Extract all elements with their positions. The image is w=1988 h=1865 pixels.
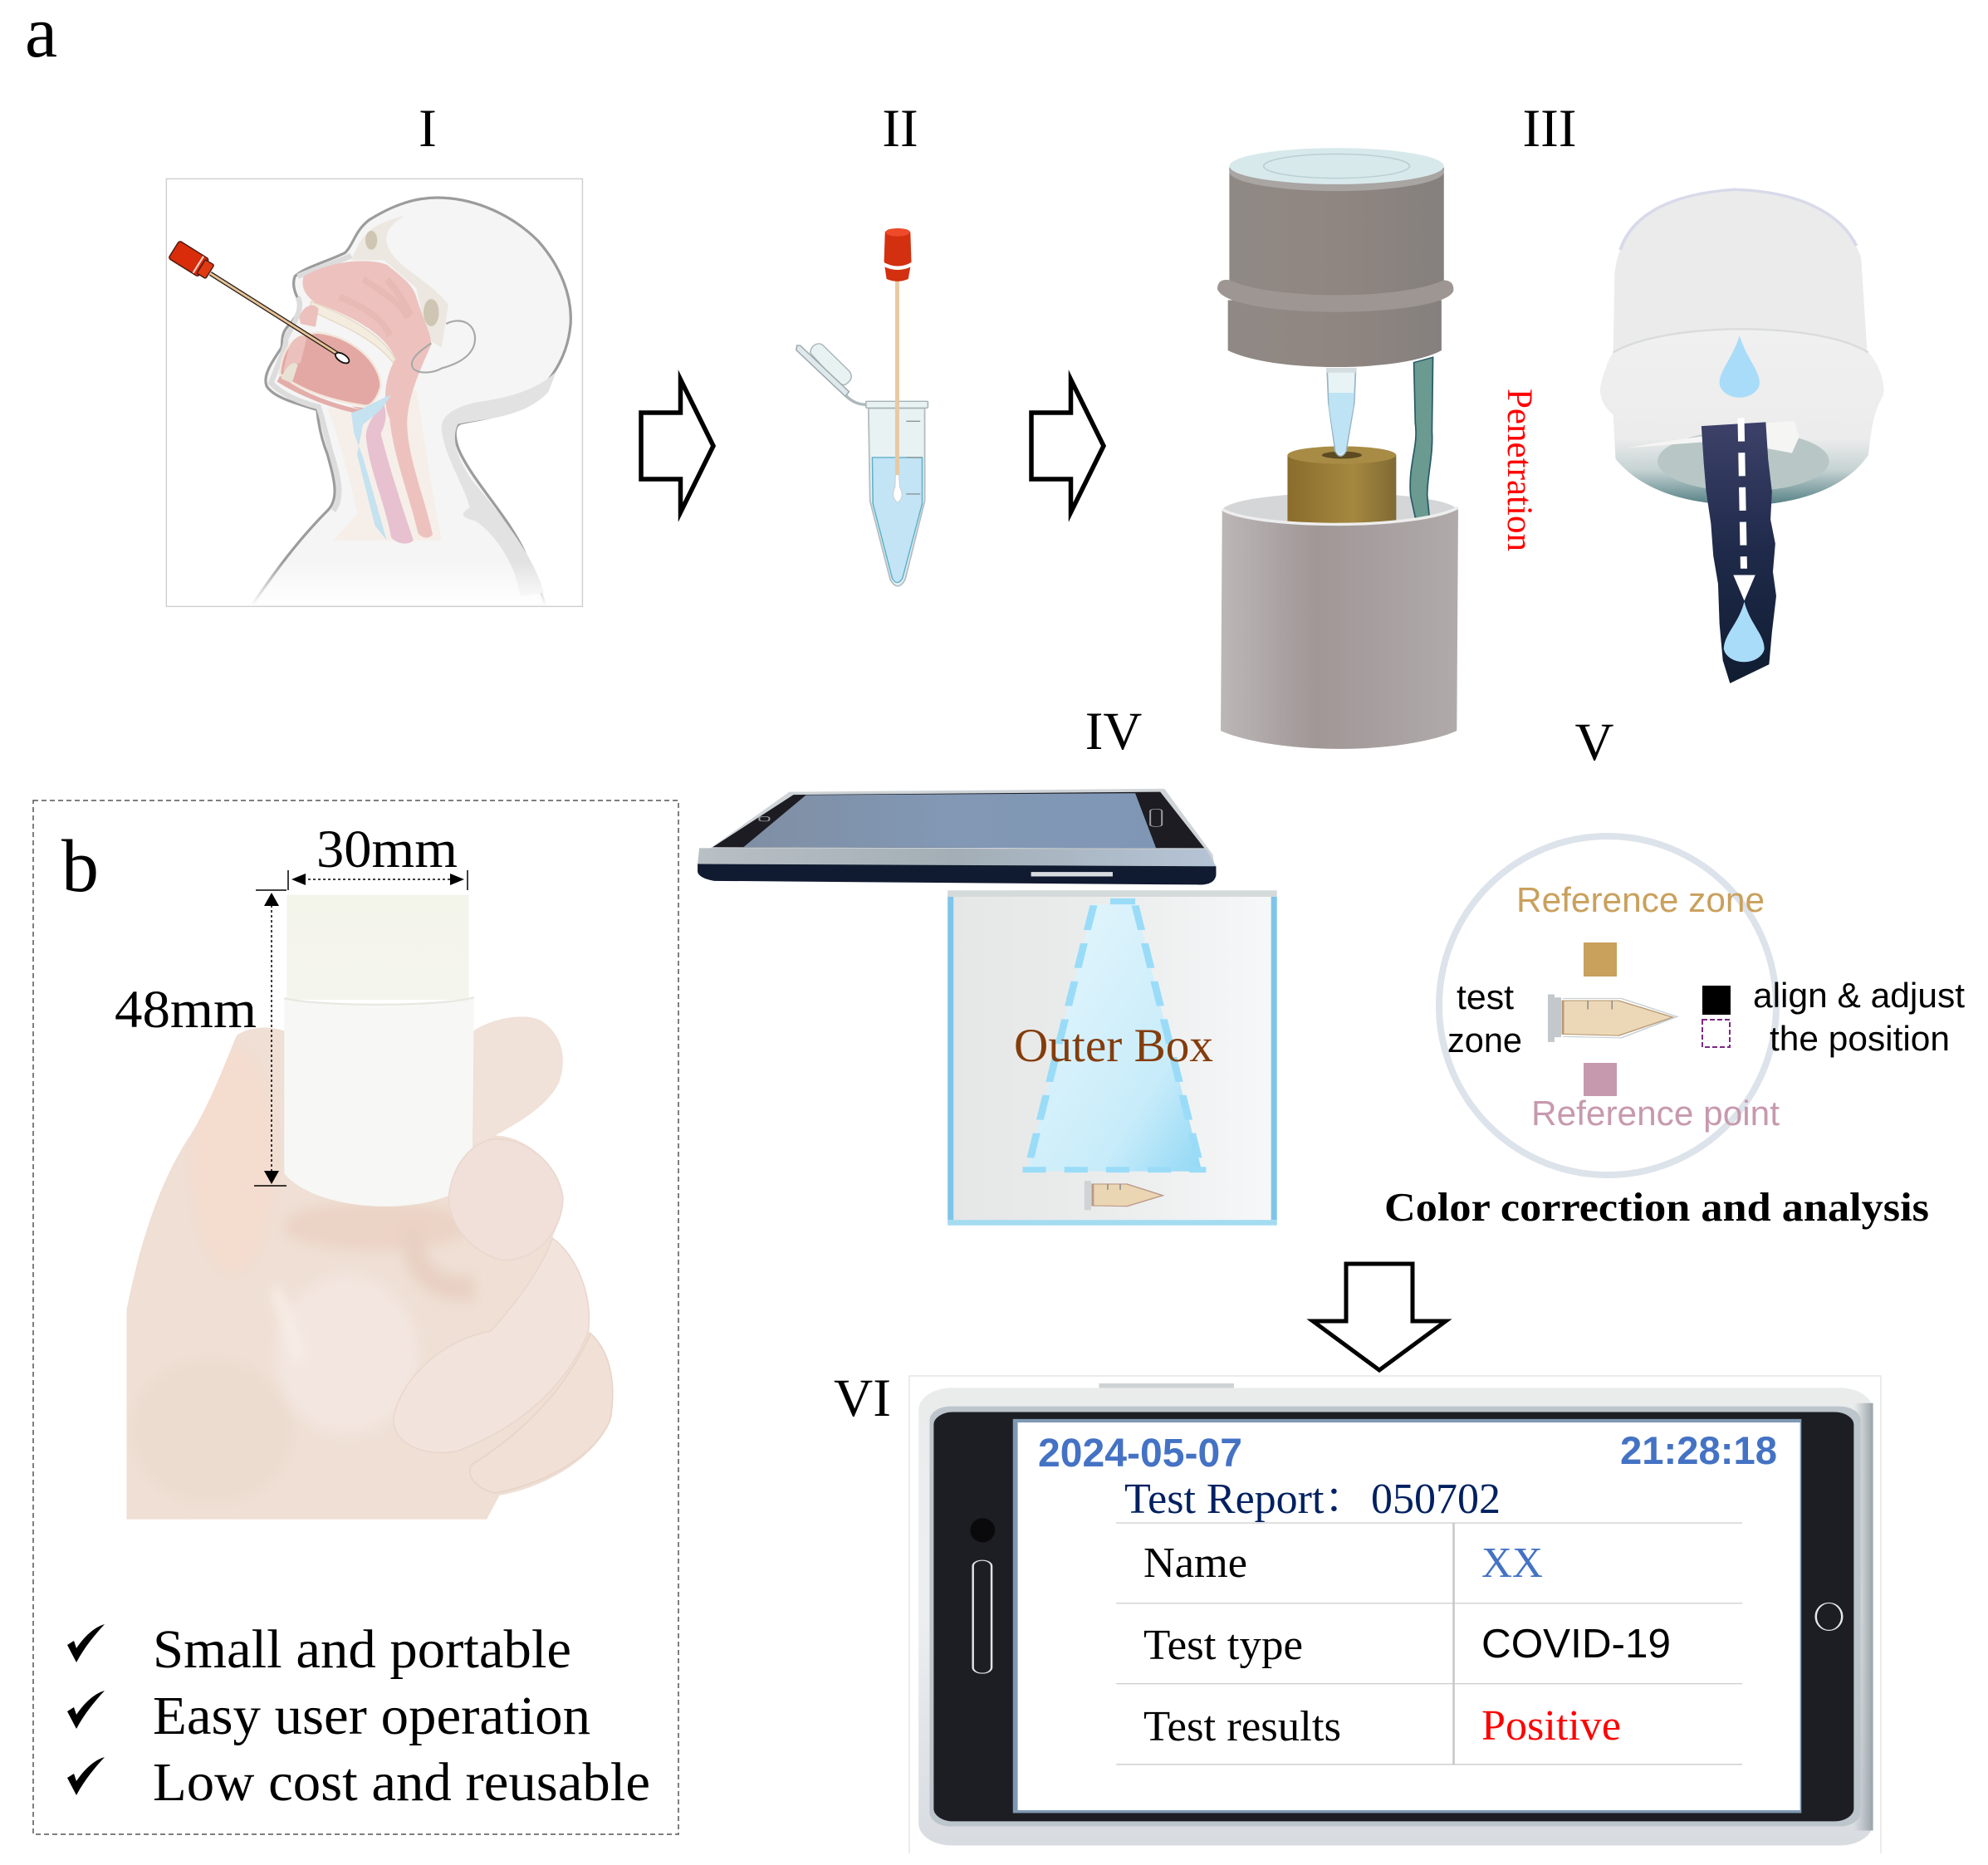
time: 21:28:18	[1620, 1428, 1777, 1472]
alignment marker solid	[1702, 986, 1731, 1015]
reagent tube	[1326, 368, 1357, 456]
swab cap	[169, 241, 215, 281]
device flange line	[284, 997, 474, 1005]
arrow II to III	[1031, 379, 1104, 512]
lid inner ring	[1264, 154, 1409, 179]
tube marks	[906, 421, 923, 494]
panel label b: b	[61, 825, 99, 908]
dimension 48mm label: 48mm	[115, 980, 257, 1040]
screen	[1018, 1422, 1800, 1810]
nasal airway	[302, 261, 433, 538]
align label: align & adjust	[1753, 976, 1965, 1015]
gold sample pad	[1287, 446, 1396, 530]
inner edge	[929, 1407, 1861, 1827]
Penetration label: Penetration	[1500, 389, 1539, 551]
thyroid cartilage	[351, 395, 391, 541]
skull bone	[351, 216, 448, 348]
foam top rim	[1620, 189, 1856, 250]
position label: the position	[1770, 1019, 1950, 1058]
arrow I to II	[641, 379, 713, 512]
tablet side button	[1031, 872, 1113, 876]
cap highlight	[885, 228, 910, 237]
home button	[1816, 1603, 1842, 1630]
arrow V to VI	[1313, 1264, 1446, 1370]
reference point label: Reference point	[1531, 1094, 1780, 1133]
test label: test	[1457, 977, 1514, 1016]
box bottom edge	[947, 1220, 1277, 1226]
report title: 050702	[1371, 1476, 1501, 1523]
shoulder groove	[1613, 329, 1868, 352]
reference zone label: Reference zone	[1516, 880, 1765, 919]
upper drop	[1720, 335, 1760, 398]
lower cup rim highlight	[1222, 507, 1458, 524]
ear	[412, 321, 475, 373]
upper cup body	[1229, 168, 1444, 295]
sinus cavities	[365, 231, 377, 250]
front camera	[970, 1518, 995, 1542]
tube in box	[1085, 1181, 1163, 1210]
upper cup lower section	[1228, 300, 1442, 367]
color correction caption: Color correction and analysis	[1384, 1184, 1929, 1230]
phone right shading	[1853, 1403, 1873, 1830]
open lid	[796, 344, 866, 404]
feature 1: Small and portable	[153, 1619, 571, 1680]
check mark 3	[67, 1757, 105, 1795]
tablet bezel	[712, 792, 1204, 848]
box top edge	[947, 890, 1277, 897]
tube body	[869, 409, 925, 586]
phone graphics	[918, 1383, 1873, 1845]
flow arrow head	[1733, 575, 1755, 601]
upper cup lid	[1229, 148, 1444, 184]
cap band	[884, 262, 911, 270]
face inner shadow	[271, 256, 351, 511]
name value: XX	[1481, 1539, 1543, 1587]
device lower section	[284, 997, 474, 1207]
lips	[283, 306, 319, 371]
white rod	[1628, 421, 1799, 453]
little finger	[470, 1334, 613, 1493]
report title: Test Report：	[1124, 1476, 1367, 1523]
palate	[310, 301, 395, 362]
panel VI: phone report	[909, 1376, 1881, 1853]
tablet side band	[698, 848, 1216, 866]
foam cup upper	[1613, 189, 1868, 355]
panel IV: phone above outer box	[698, 789, 1277, 1226]
swab head	[894, 475, 902, 502]
screen frame	[1013, 1419, 1801, 1813]
swab tip	[334, 350, 350, 365]
panel b frame	[33, 800, 678, 1834]
cone dashed sides	[1027, 905, 1202, 1172]
dimension 30mm arrow	[288, 870, 468, 890]
report table lines	[1116, 1523, 1742, 1765]
tablet screen	[743, 793, 1156, 848]
shadow below device	[283, 1202, 470, 1250]
green wick	[1410, 357, 1433, 520]
thumb tone	[190, 1045, 275, 1274]
flow dashes	[1741, 418, 1744, 569]
alignment marker dashed	[1702, 1020, 1730, 1047]
panel III: foam device photo with flow arrow	[1600, 189, 1883, 683]
index finger	[474, 1016, 563, 1145]
dimension 48mm arrow	[254, 890, 286, 1186]
lower cup rim back	[1222, 493, 1458, 530]
step label V: V	[1575, 712, 1614, 772]
date: 2024-05-07	[1038, 1432, 1242, 1476]
name label: Name	[1143, 1539, 1247, 1587]
upper cup flange	[1217, 280, 1453, 312]
image frame	[166, 179, 582, 606]
jaw bone	[282, 363, 298, 383]
lower drop	[1724, 601, 1765, 662]
foam cup lower	[1600, 329, 1883, 506]
outer box	[947, 890, 1277, 1226]
reference point swatch	[1584, 1063, 1617, 1096]
panel V: color correction view	[1439, 836, 1965, 1175]
test type label: Test type	[1143, 1622, 1303, 1669]
check mark 1	[67, 1624, 105, 1662]
step label III: III	[1523, 99, 1576, 159]
turbinates	[340, 279, 410, 335]
feature list	[67, 1619, 650, 1813]
panel III: device assembly exploded view	[1217, 148, 1458, 749]
finger shadow	[413, 1226, 474, 1289]
step label VI: VI	[834, 1368, 891, 1428]
palm folds	[272, 1290, 288, 1319]
panel b: hand holding device	[126, 895, 613, 1520]
test results label: Test results	[1143, 1703, 1341, 1750]
neck tissue	[327, 389, 442, 541]
sample liquid	[872, 458, 923, 583]
palm lower tone	[131, 1359, 291, 1503]
panel II: swab in sample tube	[796, 228, 928, 586]
tablet home key	[1150, 809, 1162, 826]
device upper section	[286, 895, 469, 1000]
cone top	[1110, 898, 1135, 904]
feature 3: Low cost and reusable	[153, 1752, 650, 1813]
tablet base	[698, 864, 1216, 884]
palm center highlight	[275, 1274, 419, 1436]
swab stick	[895, 281, 899, 476]
sinus cavity lower	[424, 299, 439, 326]
alignment circle	[1439, 836, 1776, 1175]
feature 2: Easy user operation	[153, 1686, 590, 1746]
panel I: nasopharyngeal swab anatomy	[166, 179, 582, 606]
box left and right edges	[947, 897, 1277, 1220]
light cone	[1027, 904, 1202, 1172]
tablet top surface	[698, 789, 1214, 865]
step label I: I	[419, 99, 437, 159]
glove hand	[126, 1016, 613, 1520]
floor of mouth	[277, 375, 367, 413]
speaker	[973, 1560, 992, 1673]
image frame	[909, 1376, 1881, 1853]
inner hole	[1657, 431, 1829, 492]
dimension 30mm label: 30mm	[316, 820, 458, 879]
neck shadow	[442, 371, 556, 597]
head silhouette	[252, 198, 570, 605]
cone dashed base	[1023, 1163, 1206, 1177]
Outer Box label: Outer Box	[1014, 1020, 1213, 1072]
cloth wick	[1702, 422, 1776, 683]
phone bezel	[933, 1412, 1853, 1821]
shoulder fade	[238, 561, 565, 606]
tube rim	[866, 401, 928, 408]
blurred tones	[194, 1050, 473, 1432]
ring finger	[394, 1238, 589, 1452]
test type value: COVID-19	[1481, 1622, 1671, 1667]
top button	[1099, 1383, 1234, 1389]
test results value: Positive	[1481, 1702, 1621, 1750]
trachea	[366, 404, 414, 544]
middle finger overlap	[448, 1139, 563, 1260]
tablet camera	[759, 817, 769, 821]
lower cup front wall	[1221, 507, 1458, 749]
palm shading	[194, 1050, 473, 1432]
phone body	[918, 1388, 1873, 1845]
swab shaft	[210, 273, 340, 355]
swab cap	[884, 228, 911, 281]
swab in nose	[169, 241, 350, 365]
test tube	[1551, 994, 1677, 1042]
check mark 2	[67, 1691, 105, 1729]
step label II: II	[882, 99, 918, 159]
reference zone swatch	[1584, 942, 1617, 977]
tongue	[280, 333, 381, 406]
lid bevel	[1229, 153, 1444, 191]
step label IV: IV	[1085, 702, 1142, 761]
zone label: zone	[1447, 1021, 1522, 1060]
